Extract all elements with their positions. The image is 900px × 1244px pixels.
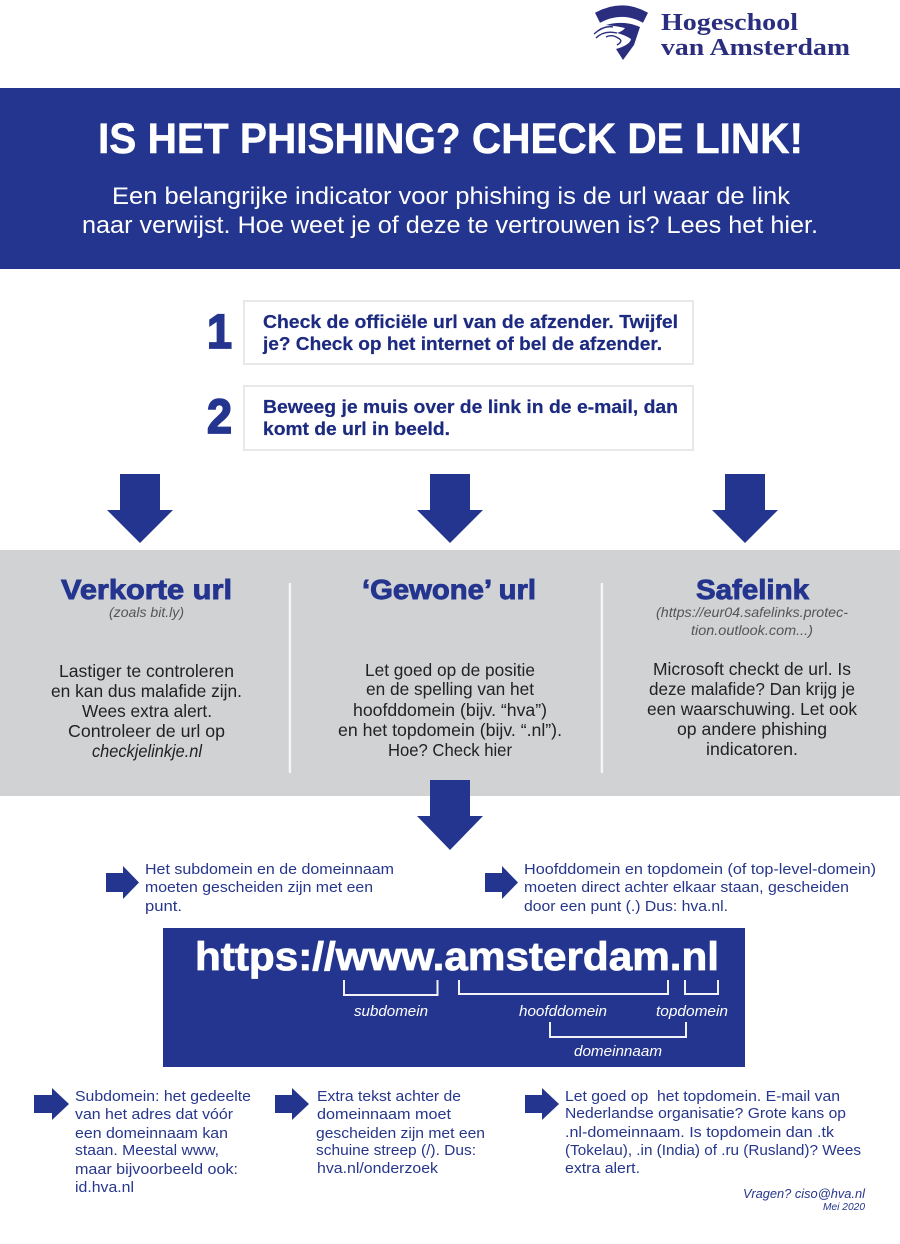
step 2 box: komt de url in beeld. [263,419,450,439]
note: hoofddomein en topdomein [485,861,876,915]
note: subdomein en domeinnaam [106,861,394,915]
step 2 box: Beweeg je muis over de link in de e-mail, dan [263,397,678,417]
step 1 box [244,301,693,364]
column: Gewone url: Hoe? Check hier [388,740,512,760]
logo wordmark: van Amsterdam [661,34,850,61]
icon: small arrow [485,866,518,899]
note: subdomein en domeinnaam: punt. [145,898,182,915]
bracket labels: domeinnaam [574,1043,662,1060]
note: subdomein uitleg: van het adres dat vóór [75,1106,233,1123]
note: subdomein en domeinnaam: moeten gescheiden zijn met een [145,879,373,896]
column: Verkorte url: en kan dus malafide zijn. [51,681,242,701]
note: subdomein uitleg: een domeinnaam kan [75,1125,228,1142]
icon: small arrow [525,1088,559,1120]
logo: Hogeschool van Amsterdam [594,5,850,61]
note: topdomein [525,1088,861,1177]
number 2: 2 [207,391,232,444]
intro text: naar verwijst. Hoe weet je of deze te vertrouwen is? Lees het hier. [82,212,818,239]
logo wordmark: Hogeschool [661,9,798,36]
step 1 box: Check de officiële url van de afzender. Twijfel [263,312,678,332]
column: Safelink [647,574,857,759]
step 1 box: je? Check op het internet of bel de afzender. [262,334,662,354]
column: Gewone url: Let goed op de positie [365,660,535,680]
column: Safelink: op andere phishing [677,719,827,739]
panel: header band [0,88,900,269]
column: Gewone url [338,574,562,760]
column: Safelink: indicatoren. [706,739,798,759]
column: Verkorte url: Wees extra alert. [82,701,212,721]
icon: small arrow [34,1088,69,1120]
note: extra tekst: gescheiden zijn met een [316,1125,485,1142]
contact footer: Vragen? ciso@hva.nl [743,1186,866,1201]
note: topdomein: Nederlandse organisatie? Grote kans op [565,1105,846,1122]
note: extra tekst: hva.nl/onderzoek [317,1160,438,1177]
icon: small arrow [106,866,139,899]
intro text [82,183,818,239]
note: extra tekst [275,1088,485,1177]
column: Verkorte url: (zoals bit.ly) [109,604,184,620]
note: extra tekst: domeinnaam moet [317,1106,452,1123]
column: Gewone url: en het topdomein (bijv. “.nl”). [338,720,562,740]
note: hoofddomein en topdomein: Hoofddomein en topdomein (of top-level-domein) [524,861,876,878]
note: subdomein uitleg: maar bijvoorbeeld ook: [75,1161,238,1178]
icon: small arrow [275,1088,309,1120]
note: topdomein: .nl-domeinnaam. Is topdomein dan .tk [565,1124,834,1141]
column: Verkorte url: Verkorte url [61,574,232,605]
column: Gewone url: en de spelling van het [366,679,534,699]
note: subdomein uitleg [34,1088,251,1196]
bracket labels: topdomein [656,1003,728,1020]
step 2 [207,386,693,450]
note: subdomein uitleg: Subdomein: het gedeelte [75,1088,251,1105]
bracket labels: subdomein [354,1003,428,1020]
bracket labels [354,1003,728,1060]
column: Gewone url: hoofddomein (bijv. “hva”) [353,700,547,720]
icon: logo mark [594,5,648,60]
note: topdomein: extra alert. [565,1160,640,1177]
column: Safelink: (https://eur04.safelinks.protec- [656,604,848,620]
note: topdomein: (Tokelau), .in (India) of .ru (Rusland)? Wees [565,1142,861,1159]
note: extra tekst: Extra tekst achter de [317,1088,461,1105]
contact footer: Mei 2020 [823,1202,865,1213]
column: Safelink: Safelink [696,574,809,605]
arrow: down right [712,474,778,543]
step 1 [207,301,693,364]
arrow: down to url explanation [417,780,483,850]
brackets [344,980,718,1037]
arrow: down left [107,474,173,543]
note: subdomein en domeinnaam: Het subdomein en de domeinnaam [145,861,394,878]
panel: url types [0,550,900,796]
intro text: Een belangrijke indicator voor phishing is de url waar de link [112,183,791,210]
title: IS HET PHISHING? CHECK DE LINK! [98,115,803,163]
note: subdomein uitleg: id.hva.nl [75,1179,134,1196]
column: Safelink: tion.outlook.com...) [691,622,813,638]
column: Verkorte url [51,574,242,761]
note: subdomein uitleg: staan. Meestal www, [75,1142,219,1159]
column: Verkorte url: Lastiger te controleren [59,661,234,681]
column: Safelink: deze malafide? Dan krijg je [649,679,855,699]
number 1: 1 [207,306,232,359]
note: topdomein: Let goed op het topdomein. E-mail van [565,1088,840,1105]
bracket labels: hoofddomein [519,1003,607,1020]
column: Verkorte url: Controleer de url op [68,721,225,741]
contact footer [743,1186,866,1213]
note: extra tekst: schuine streep (/). Dus: [316,1142,476,1159]
panel: url anatomy [163,928,745,1067]
note: hoofddomein en topdomein: moeten direct achter elkaar staan, gescheiden [524,879,849,896]
column: Verkorte url: checkjelinkje.nl [92,741,203,761]
column: Safelink: een waarschuwing. Let ook [647,699,857,719]
step 2 box [244,386,693,450]
note: hoofddomein en topdomein: door een punt (.) Dus: hva.nl. [524,898,728,915]
arrow: down middle [417,474,483,543]
column: Safelink: Microsoft checkt de url. Is [653,659,851,679]
url example: https://www.amsterdam.nl [195,935,719,979]
logo wordmark [661,9,850,61]
column: Gewone url: ‘Gewone’ url [362,574,536,605]
